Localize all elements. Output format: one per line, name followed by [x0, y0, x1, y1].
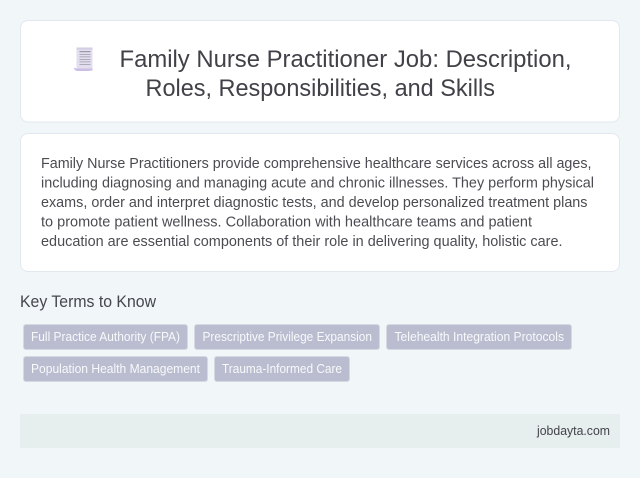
- title: [120, 46, 572, 102]
- title: Family Nurse Practitioner Job: Description,: [120, 46, 572, 73]
- description text: Family Nurse Practitioners provide comprehensive healthcare services across all ages,: [41, 155, 592, 172]
- footer: [20, 414, 620, 448]
- heading: key terms: Key Terms to Know: [20, 293, 156, 311]
- description text: education are essential components of their role in delivering quality, holistic care.: [41, 233, 562, 250]
- tag: population health management: [24, 356, 208, 382]
- title: Roles, Responsibilities, and Skills: [146, 75, 495, 102]
- description text: to promote patient wellness. Collaboration with healthcare teams and patient: [41, 214, 533, 230]
- tag: full practice authority: Full Practice Authority (FPA): [31, 329, 180, 344]
- tag group: key terms: [24, 324, 572, 382]
- description text: [41, 155, 594, 250]
- description text: including diagnosing and managing acute and chronic illnesses. They perform physical: [41, 174, 594, 192]
- tag: population health management: Population Health Management: [31, 361, 200, 376]
- tag: trauma-informed care: Trauma-Informed Care: [222, 361, 342, 376]
- description text: exams, order and interpret diagnostic tests, and develop personalized treatment plans: [41, 194, 588, 211]
- tag: full practice authority: [24, 324, 188, 350]
- footer source: jobdayta.com: [536, 424, 610, 438]
- tag: telehealth integration protocols: Telehealth Integration Protocols: [394, 329, 564, 344]
- tag: trauma-informed care: [214, 356, 350, 382]
- panel: header: [20, 20, 620, 122]
- panel: description: [20, 134, 620, 272]
- icon: document scroll: [74, 48, 92, 71]
- tag: prescriptive privilege expansion: Prescriptive Privilege Expansion: [202, 329, 372, 344]
- tag: prescriptive privilege expansion: [194, 324, 380, 350]
- tag: telehealth integration protocols: [386, 324, 572, 350]
